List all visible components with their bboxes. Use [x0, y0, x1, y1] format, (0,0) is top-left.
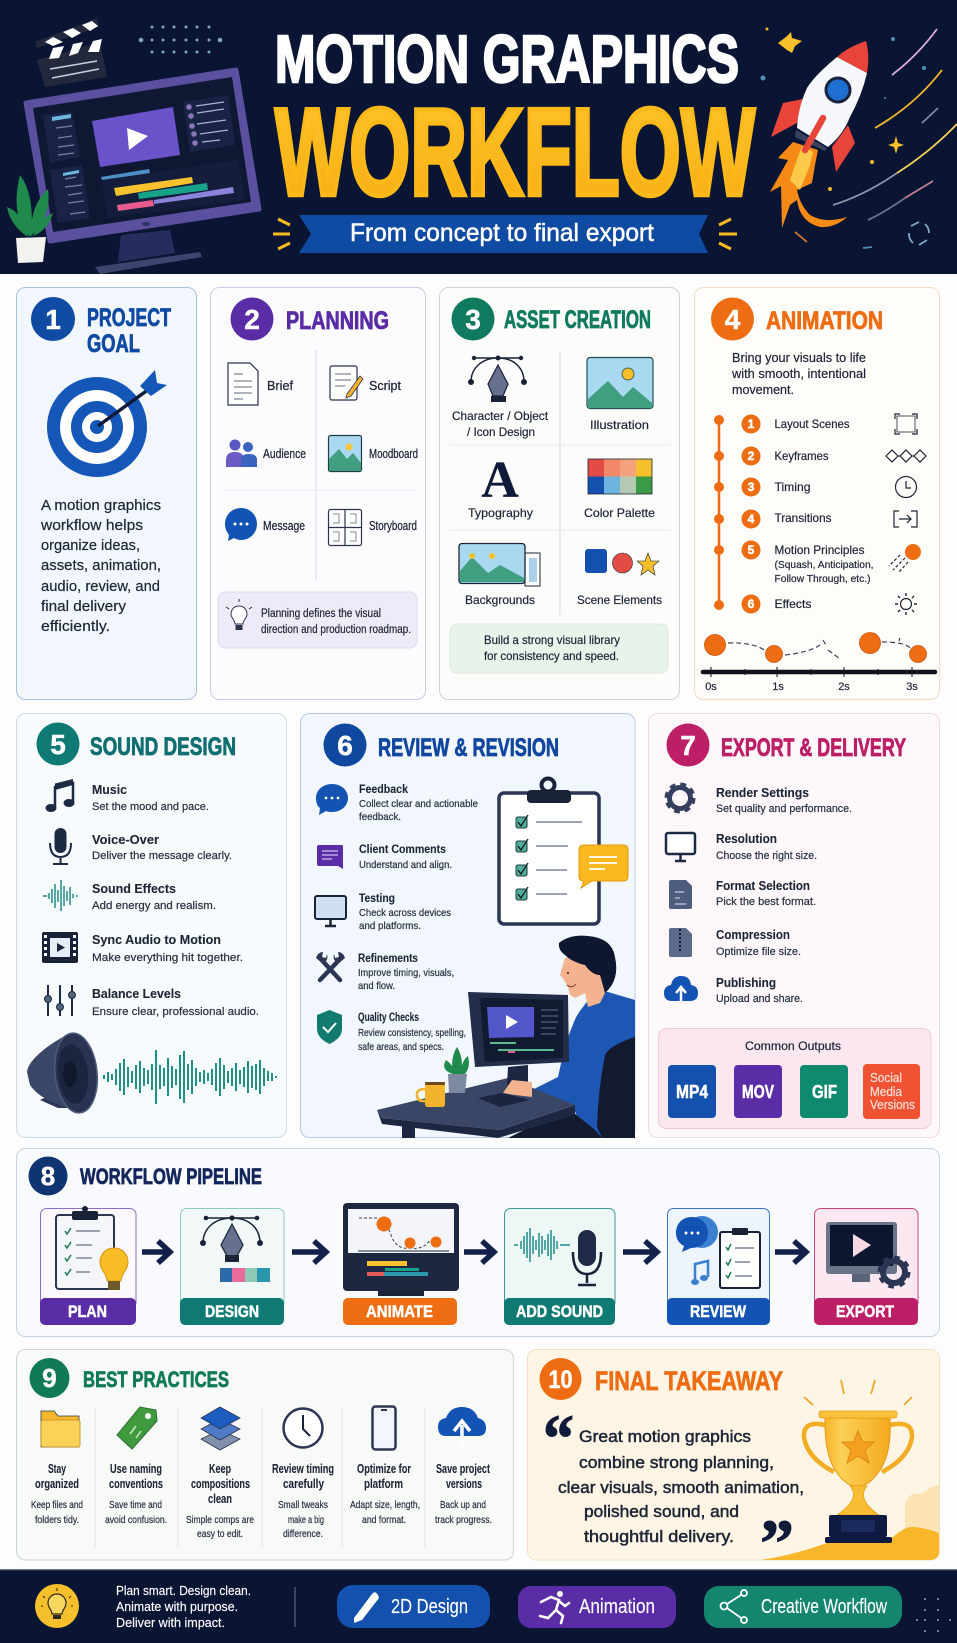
callout: planning note: direction and production roadmap.	[261, 624, 411, 636]
tile: social media versions: Social	[870, 1071, 902, 1085]
icon: target with arrow	[47, 370, 167, 477]
tile: mov	[734, 1065, 782, 1118]
step 3 badge: 3	[465, 304, 481, 335]
item: feedback: Collect clear and actionable	[359, 798, 478, 810]
item: audience: Audience	[263, 447, 306, 461]
timeline with bouncing balls: 2s	[838, 681, 850, 693]
step 6 badge: 6	[337, 730, 353, 761]
step 5 badge	[36, 722, 80, 766]
panel: planning	[210, 288, 426, 700]
closing quote: ”	[760, 1505, 794, 1581]
practice: save versions: versions	[446, 1476, 482, 1491]
icon: comment bubble	[579, 845, 628, 888]
item: backgrounds: Backgrounds	[465, 593, 535, 607]
tagline	[116, 1583, 251, 1630]
practice: optimize for platform: Adapt size, length,	[350, 1499, 420, 1511]
tagline: Animate with purpose.	[116, 1599, 238, 1614]
panel: animation	[694, 288, 940, 700]
practice: review timing: make a big	[288, 1514, 324, 1526]
practice: review timing: carefully	[283, 1476, 325, 1491]
panel: review and revision	[300, 714, 635, 1138]
icon: rocket	[770, 41, 868, 228]
waveform	[104, 1050, 276, 1104]
item: brief: Brief	[267, 379, 294, 393]
title	[275, 22, 755, 222]
item: quality checks: safe areas, and specs.	[358, 1041, 444, 1053]
step 8 badge	[28, 1156, 68, 1196]
step 1 badge	[31, 297, 75, 341]
panel: workflow pipeline	[16, 1148, 940, 1336]
practice: save versions: track progress.	[435, 1514, 492, 1526]
heading: GOAL	[87, 330, 140, 358]
description: efficiently.	[41, 618, 110, 635]
callout: asset note	[450, 624, 668, 673]
timeline steps: 1	[748, 417, 755, 431]
step 4 badge: 4	[725, 304, 741, 335]
item: publishing: Upload and share.	[716, 993, 803, 1005]
practice: stay organized	[31, 1411, 83, 1526]
item: storyboard	[328, 510, 417, 546]
panel: sound design	[16, 714, 286, 1138]
item: voice-over	[50, 828, 232, 864]
item: storyboard: Storyboard	[369, 519, 417, 533]
item: brief	[228, 363, 294, 405]
practice: clean compositions: Simple comps are	[186, 1514, 254, 1526]
item: testing	[315, 891, 451, 932]
step 9 badge	[30, 1358, 70, 1398]
item: render settings	[667, 785, 852, 815]
item: music: Set the mood and pace.	[92, 801, 209, 813]
item: voice-over: Voice-Over	[92, 832, 159, 847]
practice: naming conventions: conventions	[109, 1476, 163, 1491]
item: quality checks: Quality Checks	[358, 1012, 419, 1024]
item: voice-over: Deliver the message clearly.	[92, 850, 232, 862]
callout: planning note: Planning defines the visual	[261, 608, 381, 620]
step: add sound	[504, 1208, 615, 1325]
timeline steps: 5	[748, 543, 755, 557]
item: pen tool	[452, 356, 549, 439]
practice: stay organized: Keep files and	[31, 1499, 83, 1511]
tile: social media versions: Versions	[870, 1098, 915, 1112]
item: client comments	[317, 842, 452, 871]
tile: gif: GIF	[812, 1082, 837, 1102]
timeline with bouncing balls	[703, 632, 935, 693]
step 7 badge: 7	[680, 730, 696, 761]
step: export: EXPORT	[836, 1302, 895, 1321]
item: client comments: Understand and align.	[359, 859, 452, 871]
timeline steps: Keyframes	[774, 449, 828, 463]
practice: review timing	[272, 1408, 334, 1540]
keyboard and hands	[478, 1093, 530, 1107]
tile: gif	[800, 1065, 848, 1118]
item: sound effects: Add energy and realism.	[92, 900, 216, 912]
step 5 badge: 5	[50, 729, 66, 760]
practice: review timing: Small tweaks	[278, 1499, 328, 1511]
arrow	[775, 1241, 806, 1263]
quote text: combine strong planning,	[579, 1453, 774, 1472]
timeline steps: Layout Scenes	[774, 417, 850, 431]
timeline steps: 3	[748, 480, 755, 494]
step 9 badge: 9	[42, 1363, 57, 1393]
step: export	[814, 1208, 918, 1325]
desk	[377, 1078, 602, 1138]
panel: final takeaway	[528, 1350, 940, 1581]
description: final delivery	[41, 598, 127, 615]
quote text: polished sound, and	[584, 1502, 739, 1521]
item: client comments: Client Comments	[359, 842, 446, 856]
practice: optimize for platform: and format.	[362, 1514, 406, 1526]
subtitle ribbon: From concept to final export	[350, 219, 654, 247]
item: resolution	[666, 831, 817, 862]
footer bar	[0, 1570, 957, 1643]
gold ground	[760, 1527, 939, 1560]
head	[559, 936, 616, 1007]
timeline steps: 6	[748, 597, 755, 611]
item: script	[330, 366, 402, 400]
arrow	[464, 1241, 494, 1263]
item: sync audio: Make everything hit together.	[92, 952, 243, 964]
item: feedback: feedback.	[359, 811, 401, 823]
step: design	[180, 1208, 284, 1325]
item: music: Music	[92, 782, 127, 797]
description: workflow helps	[40, 517, 143, 534]
item: sync audio	[42, 932, 243, 964]
opening quote: “	[543, 1400, 574, 1476]
heading: ANIMATION	[766, 307, 883, 335]
pill: creative workflow: Creative Workflow	[761, 1596, 887, 1618]
practice: save versions: Save project	[436, 1461, 490, 1476]
item: script: Script	[369, 379, 402, 393]
practice: naming conventions: Use naming	[110, 1461, 162, 1476]
tagline: Deliver with impact.	[116, 1615, 225, 1630]
item: typography	[468, 452, 533, 520]
icon: trophy	[804, 1380, 912, 1543]
item: format selection: Format Selection	[716, 878, 810, 893]
item: resolution: Choose the right size.	[716, 850, 817, 862]
panel: project goal	[16, 288, 196, 700]
quote text: clear visuals, smooth animation,	[558, 1478, 804, 1497]
item: compression: Compression	[716, 927, 790, 942]
item: refinements: and flow.	[358, 980, 395, 992]
step 6 badge	[324, 724, 366, 766]
tile: mp4: MP4	[676, 1082, 708, 1102]
item: format selection: Pick the best format.	[716, 896, 816, 908]
common outputs box: Common Outputs	[745, 1039, 841, 1053]
item: balance levels: Ensure clear, professional audio.	[92, 1006, 259, 1018]
timeline steps: Transitions	[774, 511, 832, 525]
item: publishing: Publishing	[716, 975, 776, 990]
quote text: Great motion graphics	[579, 1427, 751, 1446]
item: pen tool: Character / Object	[452, 409, 549, 423]
item: feedback	[316, 782, 478, 823]
practice: naming conventions: Save time and	[109, 1499, 162, 1511]
step: add sound: ADD SOUND	[516, 1302, 603, 1321]
heading: SOUND DESIGN	[90, 733, 236, 761]
intro text: movement.	[732, 383, 794, 397]
practice: stay organized: organized	[35, 1476, 79, 1491]
timeline with bouncing balls: 1s	[772, 681, 784, 693]
timeline steps: Motion Principles	[774, 543, 864, 557]
motion streaks and stars	[760, 28, 957, 248]
heading	[87, 304, 171, 358]
pill: creative workflow	[704, 1586, 902, 1628]
subtitle ribbon	[273, 215, 737, 253]
item: compression	[669, 927, 801, 958]
timeline steps: Effects	[774, 597, 812, 611]
icon: computer monitor	[26, 70, 259, 274]
heading: BEST PRACTICES	[83, 1367, 229, 1392]
icon: potted plant	[7, 175, 53, 263]
practice: clean compositions: Keep	[209, 1461, 231, 1476]
timeline steps: 4	[748, 512, 755, 526]
heading: FINAL TAKEAWAY	[595, 1366, 783, 1396]
step 8 badge: 8	[41, 1161, 55, 1191]
practice: clean compositions: clean	[208, 1491, 232, 1506]
practice: optimize for platform	[350, 1406, 420, 1526]
practice: optimize for platform: platform	[364, 1476, 403, 1491]
intro text: with smooth, intentional	[731, 367, 866, 381]
timeline steps: Follow Through, etc.)	[774, 573, 870, 585]
item: refinements	[316, 952, 454, 992]
step 10 badge: 10	[548, 1366, 572, 1394]
icon: bulb badge	[35, 1584, 79, 1628]
step 7 badge	[666, 724, 710, 766]
tile: mp4	[668, 1065, 716, 1118]
step 3 badge	[452, 298, 494, 340]
item: refinements: Improve timing, visuals,	[358, 967, 454, 979]
callout: asset note: Build a strong visual library	[484, 633, 620, 647]
item: quality checks: Review consistency, spelling,	[358, 1027, 466, 1039]
step: review	[667, 1208, 770, 1325]
step: plan	[40, 1206, 136, 1325]
description: audio, review, and	[41, 578, 160, 595]
quote text	[558, 1427, 804, 1546]
item: message	[225, 508, 305, 541]
plant and mug	[417, 1047, 469, 1107]
item: moodboard: Moodboard	[369, 447, 418, 461]
timeline with bouncing balls: 3s	[906, 681, 918, 693]
quote text: thoughtful delivery.	[584, 1527, 734, 1546]
heading: WORKFLOW PIPELINE	[80, 1164, 262, 1189]
practice: clean compositions: compositions	[191, 1476, 250, 1491]
practice: stay organized: folders tidy.	[35, 1514, 79, 1526]
item: backgrounds	[459, 544, 540, 607]
item: publishing	[664, 975, 803, 1005]
timeline with bouncing balls: 0s	[705, 681, 717, 693]
step 10 badge	[540, 1358, 582, 1400]
icon: clapperboard	[35, 18, 107, 87]
step 1 badge: 1	[45, 304, 61, 335]
description: assets, animation,	[41, 557, 161, 574]
step 4 badge	[711, 298, 754, 340]
item: testing: Testing	[359, 891, 395, 905]
practice: stay organized: Stay	[48, 1461, 66, 1476]
icon: speaker	[27, 1031, 101, 1115]
pill: animation	[518, 1586, 676, 1628]
step: design: DESIGN	[205, 1302, 259, 1321]
tagline: Plan smart. Design clean.	[116, 1583, 251, 1598]
practice: clean compositions	[186, 1407, 254, 1540]
item: typography: Typography	[468, 506, 533, 520]
item: sound effects	[43, 880, 216, 912]
step: review: REVIEW	[690, 1302, 747, 1321]
heading: ASSET CREATION	[504, 306, 651, 334]
item: message: Message	[263, 519, 305, 533]
intro text	[731, 351, 866, 397]
dot grid decoration	[139, 26, 222, 54]
practice: optimize for platform: Optimize for	[357, 1461, 411, 1476]
heading: PLANNING	[286, 307, 389, 335]
monitor	[468, 992, 569, 1085]
practice: review timing: Review timing	[272, 1461, 334, 1476]
step 2 badge	[230, 298, 274, 340]
callout: planning note	[218, 592, 417, 648]
step: animate: ANIMATE	[366, 1302, 433, 1321]
person body and chair	[532, 992, 635, 1138]
practice: clean compositions: easy to edit.	[197, 1528, 243, 1540]
item: audience	[226, 440, 306, 467]
description	[40, 497, 161, 635]
item: typography: A	[481, 452, 519, 509]
timeline steps: Timing	[774, 480, 810, 494]
heading: PROJECT	[87, 304, 171, 332]
step 2 badge: 2	[244, 304, 260, 335]
step icons	[886, 414, 926, 615]
pill: 2D design: 2D Design	[391, 1596, 468, 1618]
panel: best practices	[16, 1350, 514, 1560]
callout: asset note: for consistency and speed.	[484, 649, 619, 663]
tile: social media versions	[863, 1064, 920, 1119]
practice: save versions	[435, 1407, 492, 1526]
icon: clipboard checklist	[499, 778, 599, 924]
heading: REVIEW & REVISION	[378, 734, 559, 762]
practice: save versions: Back up and	[440, 1499, 486, 1511]
item: sync audio: Sync Audio to Motion	[92, 932, 221, 947]
arrow	[142, 1241, 170, 1263]
item: color palette	[584, 459, 655, 520]
illustration: designer at desk	[377, 936, 635, 1138]
decorative blob	[905, 1485, 939, 1535]
title: MOTION GRAPHICS	[275, 22, 739, 97]
intro text: Bring your visuals to life	[732, 351, 866, 365]
item: render settings: Render Settings	[716, 785, 809, 800]
common outputs box	[658, 1028, 931, 1128]
item: testing: Check across devices	[359, 907, 451, 919]
tile: mov: MOV	[742, 1082, 774, 1102]
item: balance levels: Balance Levels	[92, 986, 181, 1001]
item: balance levels	[44, 985, 259, 1018]
description: organize ideas,	[41, 537, 140, 554]
item: scene elements: Scene Elements	[577, 593, 662, 607]
item: feedback: Feedback	[359, 782, 408, 796]
item: refinements: Refinements	[358, 953, 418, 965]
timeline steps: 2	[748, 449, 755, 463]
item: format selection	[669, 878, 816, 909]
item: music	[46, 779, 209, 813]
item: resolution: Resolution	[716, 831, 777, 846]
item: quality checks	[317, 1010, 466, 1053]
item: scene elements	[577, 549, 662, 607]
step: animate	[343, 1203, 459, 1325]
item: render settings: Set quality and performance.	[716, 803, 852, 815]
arrow	[623, 1241, 657, 1263]
tile: social media versions: Media	[870, 1085, 902, 1099]
practice: naming conventions	[105, 1407, 167, 1526]
panel: export and delivery	[648, 714, 940, 1138]
practice: review timing: difference.	[283, 1528, 323, 1540]
timeline steps	[714, 414, 874, 614]
item: pen tool: / Icon Design	[467, 425, 535, 439]
timeline steps: (Squash, Anticipation,	[774, 559, 874, 571]
item: compression: Optimize file size.	[716, 946, 801, 958]
item: illustration	[587, 358, 653, 432]
pill: 2D design	[337, 1585, 490, 1628]
practice: naming conventions: avoid confusion.	[105, 1514, 167, 1526]
description: A motion graphics	[41, 497, 161, 514]
item: moodboard	[328, 436, 418, 472]
panel: asset creation	[440, 288, 680, 700]
item: sound effects: Sound Effects	[92, 881, 176, 896]
item: testing: and platforms.	[359, 920, 421, 932]
item: illustration: Illustration	[590, 418, 649, 432]
step: plan: PLAN	[68, 1302, 107, 1321]
header banner	[0, 0, 957, 274]
pill: animation: Animation	[579, 1596, 655, 1618]
arrow	[292, 1241, 326, 1263]
item: color palette: Color Palette	[584, 506, 655, 520]
